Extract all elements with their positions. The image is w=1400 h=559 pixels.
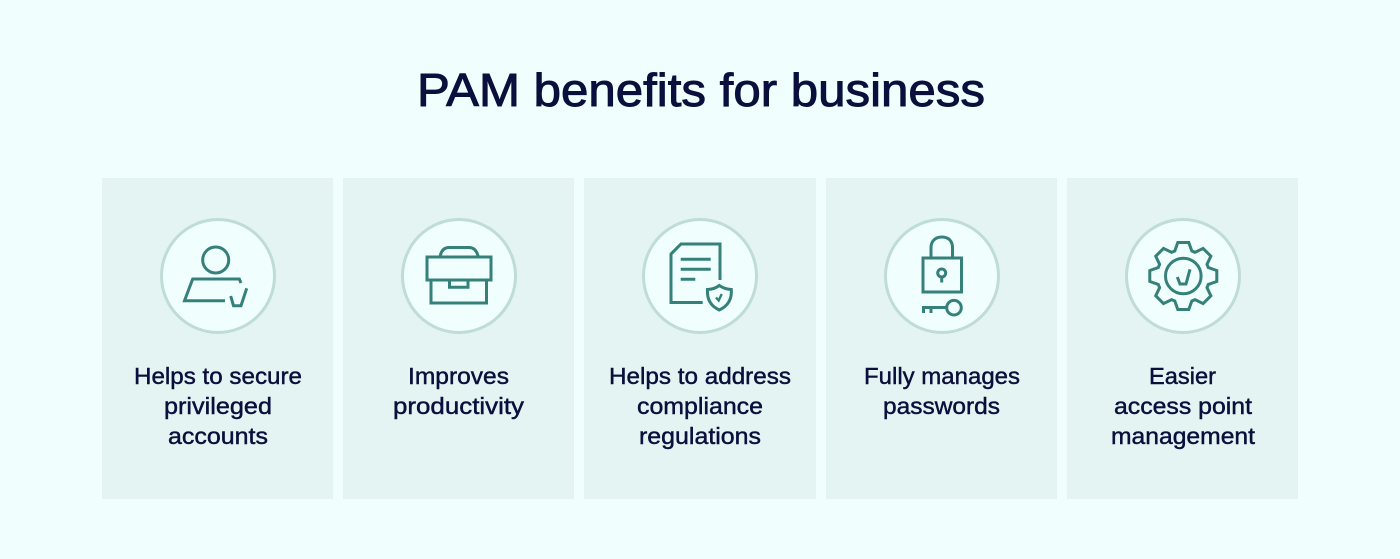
panel: improves productivity — [343, 178, 574, 499]
label: secure privileged accounts: privileged — [164, 393, 272, 419]
label: improves productivity: Improves — [408, 363, 509, 389]
icon: padlock and key — [886, 220, 998, 332]
label: secure privileged accounts: accounts — [168, 423, 268, 449]
icon: gear with check — [1126, 220, 1240, 332]
label: manages passwords — [864, 363, 1020, 419]
label: compliance regulations: Helps to address — [609, 363, 791, 389]
label: access point management: management — [1111, 423, 1255, 449]
label: access point management: Easier — [1149, 363, 1216, 389]
label: manages passwords: passwords — [883, 393, 1000, 419]
label: compliance regulations: compliance — [637, 393, 763, 419]
label: access point management: access point — [1114, 393, 1252, 419]
panel: secure privileged accounts — [102, 178, 333, 499]
label: secure privileged accounts — [134, 363, 302, 449]
title: PAM benefits for business — [417, 64, 985, 116]
panel: access point management — [1067, 178, 1298, 499]
panel: manages passwords — [826, 178, 1057, 499]
panel: compliance regulations — [584, 178, 816, 499]
label: manages passwords: Fully manages — [864, 363, 1020, 389]
label: improves productivity: productivity — [393, 393, 524, 419]
label: access point management — [1111, 363, 1255, 449]
icon: document with shield — [644, 220, 756, 332]
icon: briefcase — [402, 220, 516, 332]
icon: user with check — [162, 220, 274, 332]
label: compliance regulations — [609, 363, 791, 449]
label: secure privileged accounts: Helps to secure — [134, 363, 302, 389]
label: improves productivity — [393, 363, 524, 419]
label: compliance regulations: regulations — [639, 423, 761, 449]
